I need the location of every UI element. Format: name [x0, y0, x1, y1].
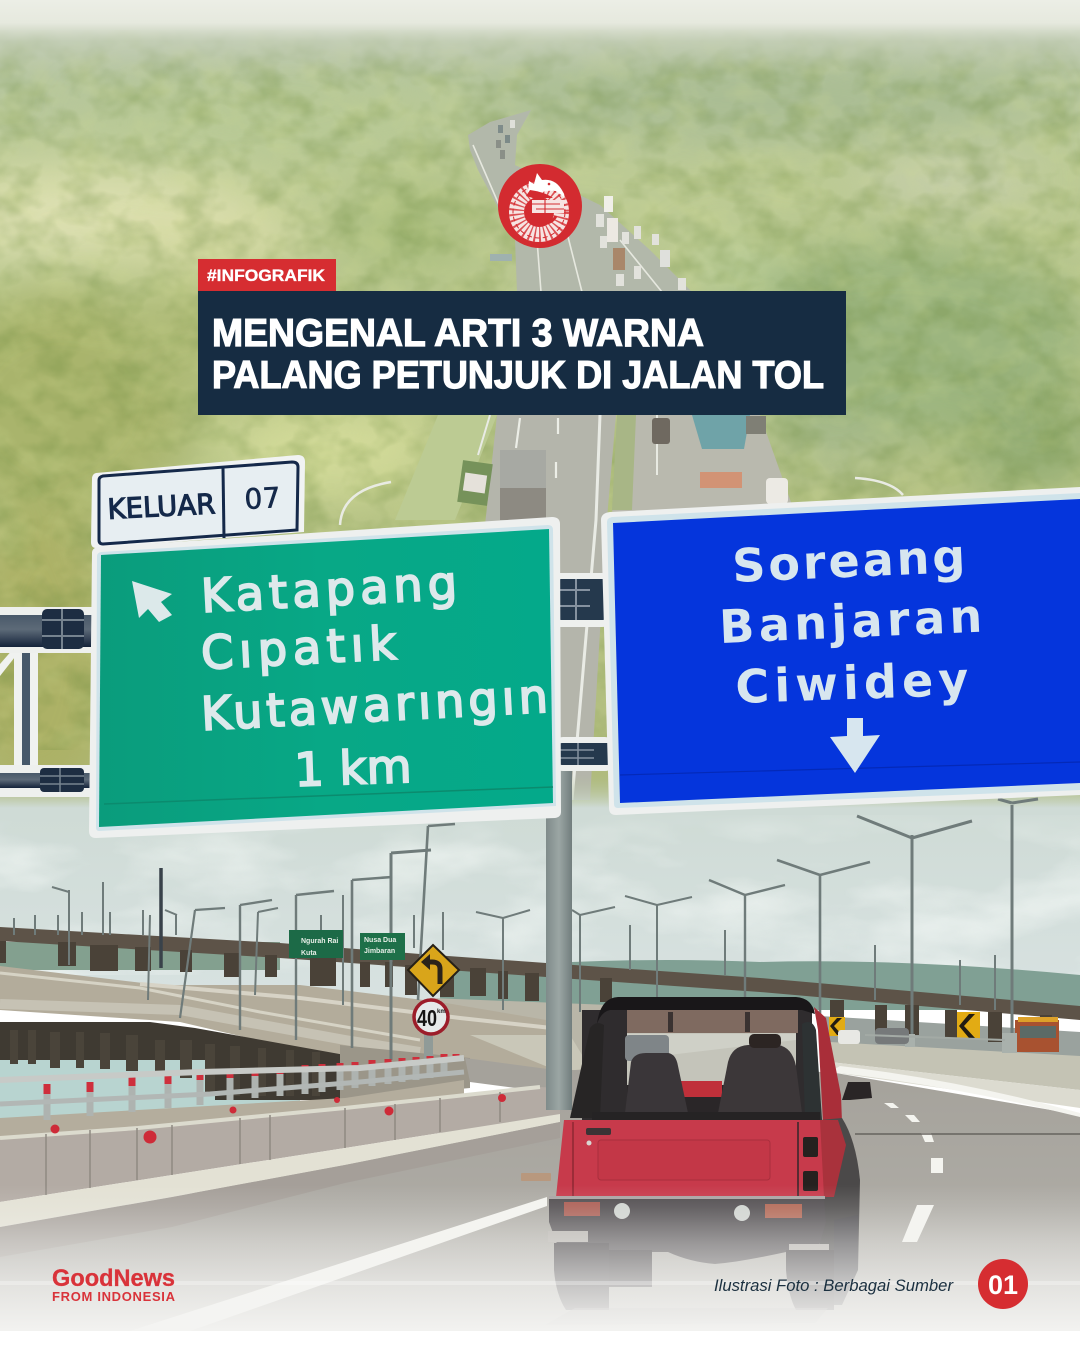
title: PALANG PETUNJUK DI JALAN TOL [212, 354, 824, 397]
overhead direction signs: Ngurah Rai [301, 938, 338, 945]
destination: banjaran: Banjaran [718, 589, 983, 654]
destination: kutawaringin: Kutawarıngın [200, 669, 549, 741]
page number badge [978, 1259, 1028, 1309]
tree canopy texture [0, 30, 1080, 750]
road markings [130, 1066, 1080, 1331]
red jeep [521, 997, 872, 1325]
tag: infografik: #INFOGRAFIK [207, 266, 326, 285]
bottom white fade [0, 1185, 1080, 1332]
page number badge: 01 [988, 1270, 1018, 1300]
side mirror [842, 1082, 872, 1100]
undercarriage and wheels [549, 1222, 826, 1264]
traffic queue [490, 120, 686, 290]
road sign support post [546, 770, 572, 1110]
overhead direction signs: Nusa Dua [364, 937, 396, 944]
lower highway vehicles and work crew [340, 415, 903, 525]
main road surface [0, 1070, 1080, 1331]
title: MENGENAL ARTI 3 WARNA [212, 312, 704, 355]
goodnews from indonesia logo: GoodNews [52, 1265, 175, 1292]
speed limit sign [414, 1000, 448, 1064]
speed limit sign: 40 [417, 1005, 437, 1031]
white page margin [0, 1331, 1080, 1350]
pole brackets left [0, 607, 96, 797]
eagle head [528, 173, 564, 197]
logo emblem [498, 164, 582, 248]
right side body [820, 1118, 860, 1270]
destination: katapang: Katapang [200, 556, 458, 623]
sky [0, 775, 1080, 1010]
water [0, 1050, 300, 1140]
tag: infografik [198, 259, 336, 291]
distance: 1 km [293, 739, 412, 797]
sign: blue direction [601, 487, 1080, 815]
arrow up-left [132, 581, 172, 622]
background: bridge and road photo [0, 770, 1080, 1350]
road joints [855, 1133, 1080, 1135]
horizon haze [0, 0, 1080, 75]
pole brackets between signs [550, 573, 615, 771]
inner G bar [526, 190, 553, 198]
view through window [627, 1033, 796, 1090]
sign: keluar 07 [91, 455, 305, 548]
keluar label: KELUAR [107, 487, 216, 526]
bumper and lights [549, 1197, 826, 1222]
goodnews from indonesia logo: FROM INDONESIA [52, 1289, 176, 1304]
tailgate [556, 1120, 824, 1197]
speed limit sign: km [437, 1009, 446, 1015]
sign: green direction [89, 517, 561, 838]
soft top frame [597, 997, 815, 1024]
concrete median barrier [0, 1087, 560, 1257]
distant hills [440, 960, 1080, 1010]
destination: soreang: Soreang [731, 529, 966, 593]
patterned ring [516, 190, 562, 234]
background: aerial toll road photo [0, 0, 1080, 850]
destination: ciwidey: Ciwidey [734, 652, 969, 714]
photo credit: Ilustrasi Foto : Berbagai Sumber [714, 1276, 954, 1295]
destination: cipatik: Cıpatık [200, 616, 398, 680]
title [198, 291, 846, 415]
highway carriageways [395, 110, 792, 800]
curved ramps [0, 966, 610, 1120]
arrow down [830, 718, 880, 773]
guard rail [0, 1054, 464, 1142]
yellow curve warning sign [408, 945, 459, 996]
right viaduct barrier and chevrons [470, 1012, 1080, 1108]
overhead direction signs: Jimbaran [364, 948, 395, 955]
overhead direction signs: Kuta [301, 950, 317, 957]
terrain colour patches [0, 64, 1080, 810]
exit number: 07 [244, 481, 281, 516]
goodnews from indonesia logo [52, 1265, 176, 1304]
street lights [14, 799, 1038, 1060]
cabin dark interior [582, 1010, 812, 1120]
seats [625, 1053, 688, 1113]
overhead direction signs [289, 930, 405, 960]
far viaduct [0, 927, 1080, 1060]
